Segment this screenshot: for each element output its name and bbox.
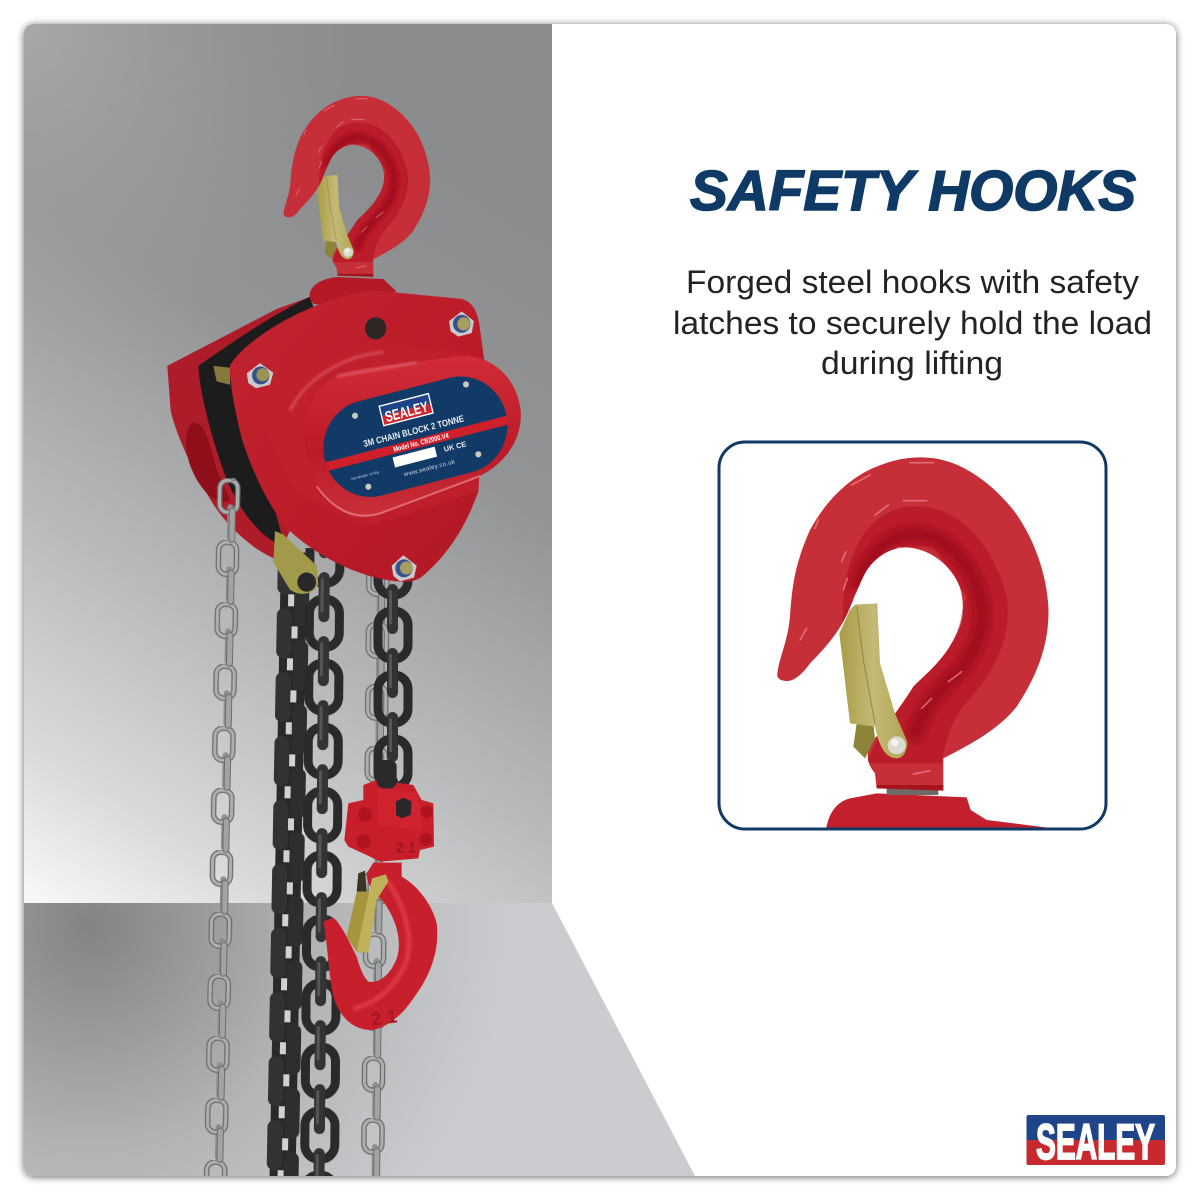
description text: Forged steel hooks with safety (686, 264, 1139, 300)
bolts (247, 311, 474, 581)
block stamp: 2 1 (396, 841, 416, 857)
hook body (323, 863, 437, 1030)
plate rivets (352, 381, 481, 490)
close-up hook and mount (777, 457, 1053, 833)
description text: latches to securely hold the load (673, 305, 1152, 341)
top swivel hook (284, 96, 430, 277)
plate serial box (393, 447, 437, 468)
data plate (323, 376, 508, 497)
front plate (230, 291, 485, 582)
panel: product photo backdrop (24, 24, 695, 1176)
chain: black chain to lower hook (374, 577, 412, 784)
gasket (198, 297, 317, 543)
hook latch (357, 871, 367, 892)
plate title: 3M CHAIN BLOCK 2 TONNE (362, 413, 465, 449)
product: chain block (167, 96, 521, 1183)
casing opening (186, 423, 230, 502)
chain: left silver hand chain (203, 478, 242, 1178)
hook stamp: 2 1 (370, 1005, 398, 1030)
chain entry (377, 760, 397, 788)
description text (673, 264, 1152, 381)
plate small text: Net Weight: 19.5kg (351, 470, 379, 481)
chain block body (167, 277, 521, 594)
chain: black twisted load chain (266, 552, 310, 1176)
block casing (344, 780, 434, 862)
plate compliance marks: UK CE (443, 439, 467, 454)
heading: SAFETY HOOKS (690, 159, 1136, 223)
block bolt (396, 798, 412, 818)
shaft bolt (213, 366, 230, 385)
plate model number: Model No. CB2000.V4 (393, 432, 449, 454)
swivel mount (309, 277, 397, 307)
lower hook assembly (323, 760, 437, 1030)
chain: black centre load chain (299, 548, 345, 1182)
boss dome (409, 476, 480, 512)
oval housing (305, 356, 521, 517)
cover plug (365, 317, 386, 339)
description text: during lifting (821, 345, 1003, 381)
panel: hook close-up inset (719, 442, 1106, 833)
shackle (273, 531, 318, 594)
plate logo: SEALEY (384, 399, 430, 426)
plate web address: www.sealey.co.uk (402, 458, 456, 479)
rear casing (167, 297, 323, 559)
plate logo (378, 393, 434, 427)
chain: right silver hand chain (361, 575, 390, 1176)
